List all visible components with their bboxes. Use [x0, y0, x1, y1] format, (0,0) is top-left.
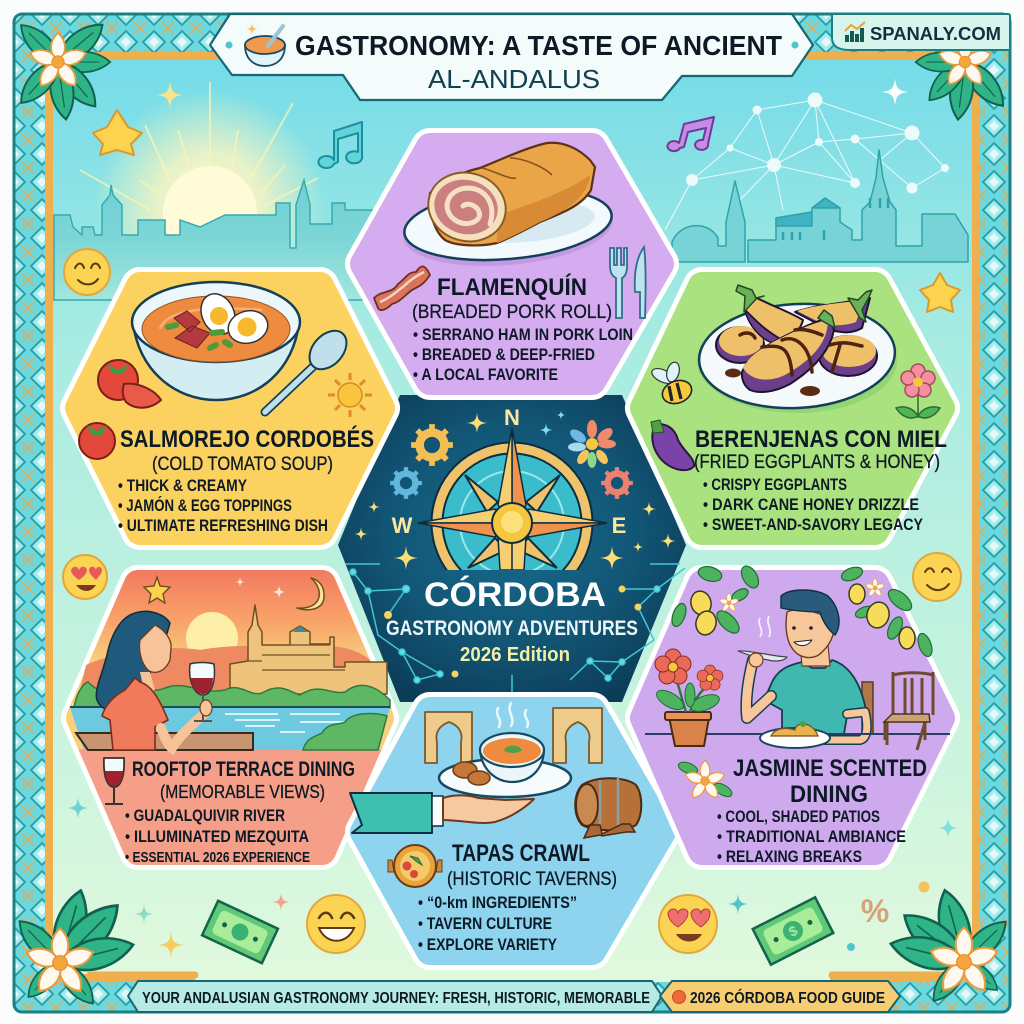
illustration: tapas plate and bowl [439, 733, 571, 797]
text: Tapas: • TAVERN CULTURE [418, 915, 552, 933]
text: Rooftop [125, 758, 355, 866]
text: Flamenquin: • SERRANO HAM IN PORK LOIN [413, 326, 633, 344]
icon: fork and knife [610, 247, 646, 318]
text: Salmorejo: • JAMÓN & EGG TOPPINGS [118, 496, 292, 515]
icon: bee [650, 361, 695, 407]
text: Jasmine: DINING [790, 781, 868, 808]
icon: wine glass [104, 758, 124, 804]
background sparkles [67, 797, 958, 958]
text: Flamenquin: • A LOCAL FAVORITE [413, 366, 558, 384]
icon: percent sign: % [861, 893, 889, 929]
left long half [745, 298, 803, 342]
compass letters: N [504, 405, 520, 430]
skyline left [54, 180, 372, 300]
illustration: table and plate [645, 721, 950, 748]
round slices [716, 327, 877, 376]
emoji: smile top left [64, 249, 110, 295]
text: Jasmine [717, 755, 927, 866]
illustration: pork roll on plate [400, 143, 616, 274]
icon: tomato small [79, 423, 115, 459]
icon: dollar bill right [753, 897, 833, 965]
text: Flamenquin [412, 273, 633, 384]
gears and flower [384, 415, 639, 505]
footer tagline: YOUR ANDALUSIAN GASTRONOMY JOURNEY: FRESH, HISTORIC, MEMORABLE [142, 990, 650, 1007]
illustration: woman with wine glass [96, 611, 215, 750]
icon: orange dot [672, 990, 686, 1004]
icon: dollar bill left [202, 901, 278, 963]
text: Jasmine: • RELAXING BREAKS [717, 848, 862, 866]
panel: Tapas crawl [350, 703, 662, 954]
icon: white sparkle [881, 78, 909, 106]
panel: Rooftop terrace [70, 577, 390, 866]
icon: teal music note [318, 122, 362, 168]
illustration: barrel [575, 778, 641, 838]
emoji: heart eyes left [63, 555, 107, 599]
text: Rooftop: • GUADALQUIVIR RIVER [125, 807, 285, 825]
icon: sun [328, 373, 372, 417]
icon: dollar bill right: $ [786, 922, 800, 940]
illustration: sky, river and mosque scene [70, 577, 390, 750]
text: Rooftop: ROOFTOP TERRACE DINING [132, 758, 355, 781]
illustration: steam [497, 703, 528, 727]
text: Salmorejo: • THICK & CREAMY [118, 477, 247, 495]
illustration: eggplant plate [696, 285, 898, 413]
illustration: flower pot [654, 649, 723, 746]
icon: sparkle yellow [156, 81, 184, 109]
text: Tapas: • “0-km INGREDIENTS” [418, 894, 577, 912]
footer badge text: 2026 CÓRDOBA FOOD GUIDE [690, 988, 885, 1007]
center title text: CÓRDOBA [424, 576, 606, 614]
back half [795, 298, 870, 332]
sun and rays [80, 82, 325, 320]
icon: star right [920, 273, 960, 312]
illustration: serving hand and sleeve [350, 793, 534, 833]
icon: paella pan [388, 845, 442, 887]
corner flower top right [916, 35, 1012, 121]
icon: soup bowl [245, 23, 285, 66]
panel: Salmorejo [79, 282, 381, 535]
text: Flamenquin: (BREADED PORK ROLL) [412, 302, 612, 323]
panel: Jasmine dining [644, 563, 950, 866]
title banner [210, 14, 813, 100]
icon: tomatoes [98, 360, 161, 408]
text: Rooftop: (MEMORABLE VIEWS) [160, 782, 325, 802]
honey drizzle [740, 329, 862, 375]
illustration: lemon branches [669, 563, 935, 658]
front long half [742, 318, 834, 392]
icon: gold star top left [93, 110, 142, 155]
text: Tapas [418, 840, 617, 954]
text: Jasmine: • COOL, SHADED PATIOS [717, 808, 880, 826]
corner flower bottom right [887, 887, 1014, 1007]
icon: spoon [265, 324, 354, 412]
text: Flamenquin: • BREADED & DEEP-FRIED [413, 346, 595, 364]
text: Flamenquin: FLAMENQUÍN [437, 273, 587, 301]
logo badge [832, 14, 1010, 50]
text: Berenjenas: • DARK CANE HONEY DRIZZLE [703, 496, 919, 514]
emoji: heart eyes bottom [659, 895, 717, 953]
corner flower top left [13, 16, 110, 121]
text: Berenjenas [694, 426, 947, 534]
text: Berenjenas: • CRISPY EGGPLANTS [703, 476, 847, 494]
skyline right with mosque [672, 150, 968, 262]
title text: GASTRONOMY: A TASTE OF ANCIENT [295, 30, 782, 61]
illustration: wooden chair [884, 672, 933, 750]
compass emblem [418, 428, 608, 570]
illustration: man eating [738, 590, 867, 740]
icon: bar chart [845, 22, 865, 42]
illustration: chair behind man [862, 682, 873, 734]
emoji: smile right [913, 553, 961, 601]
icon: jasmine flower [677, 760, 734, 800]
gold corner accents [90, 972, 945, 978]
logo text: SPANALY.COM [870, 24, 1001, 44]
text: Jasmine: • TRADITIONAL AMBIANCE [717, 828, 906, 846]
emoji: laughing face [307, 895, 365, 953]
constellation [665, 93, 948, 230]
icon: bacon [374, 266, 430, 310]
text: Salmorejo: • ULTIMATE REFRESHING DISH [118, 517, 328, 535]
icon: purple music note [667, 117, 714, 151]
icon: eggplant [651, 420, 694, 470]
text: Rooftop: • ILLUMINATED MEZQUITA [125, 828, 309, 846]
subtitle text: AL-ANDALUS [428, 64, 600, 94]
text: Berenjenas: (FRIED EGGPLANTS & HONEY) [694, 452, 940, 473]
illustration: soup bowl [132, 282, 300, 400]
constellation lines in center [345, 564, 685, 702]
compass sparkles [354, 410, 676, 570]
text: Salmorejo [118, 425, 374, 535]
footer banner [128, 981, 662, 1012]
compass letters: W [392, 513, 413, 538]
center hexagon [338, 395, 686, 702]
icon: flower [896, 364, 940, 418]
text: Berenjenas: BERENJENAS CON MIEL [695, 426, 947, 453]
compass letters [392, 405, 626, 538]
illustration: arches [425, 708, 602, 763]
text: Berenjenas: • SWEET-AND-SAVORY LEGACY [703, 516, 923, 534]
text: Tapas: (HISTORIC TAVERNS) [447, 869, 617, 890]
compass letters: E [612, 513, 626, 538]
text: Salmorejo: (COLD TOMATO SOUP) [152, 454, 333, 475]
panel: Berenjenas [644, 285, 947, 534]
footer badge [660, 981, 900, 1012]
text: Salmorejo: SALMOREJO CORDOBÉS [120, 425, 374, 453]
text: Tapas: TAPAS CRAWL [452, 840, 590, 867]
center title text: 2026 Edition [460, 644, 570, 666]
panel: Flamenquin [364, 143, 660, 384]
text: Jasmine: JASMINE SCENTED [733, 755, 927, 782]
text: Tapas: • EXPLORE VARIETY [418, 936, 557, 954]
text: Rooftop: • ESSENTIAL 2026 EXPERIENCE [125, 850, 310, 866]
center title text: GASTRONOMY ADVENTURES [386, 617, 638, 640]
corner flower bottom left [12, 886, 137, 1010]
center title text [386, 576, 638, 666]
